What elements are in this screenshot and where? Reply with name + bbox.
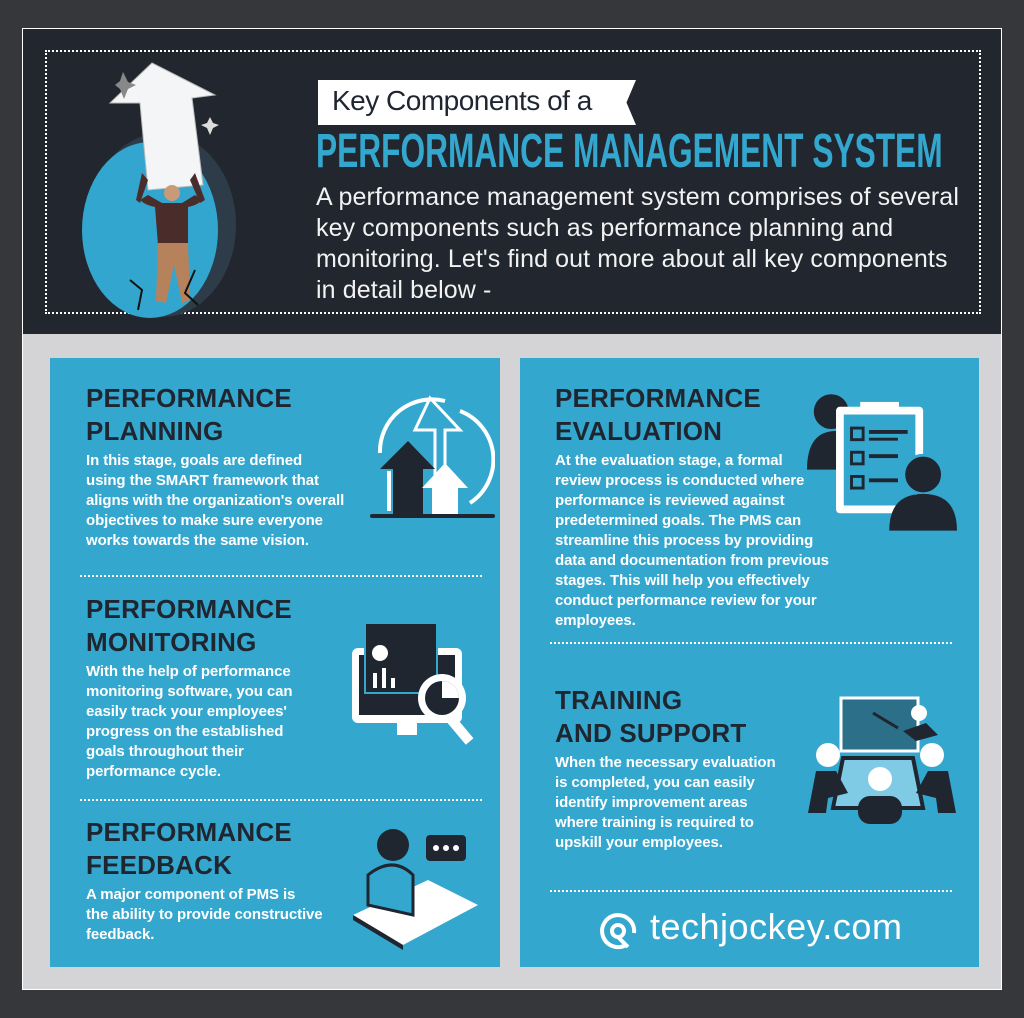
text: evaluation: stages. This will help you effectively	[555, 572, 810, 589]
text: evaluation	[555, 452, 829, 629]
heading: evaluation: EVALUATION	[555, 416, 722, 446]
intro text	[316, 183, 959, 304]
text: evaluation: employees.	[555, 612, 636, 629]
icon: feedback person	[353, 829, 478, 950]
intro text: in detail below -	[316, 276, 491, 304]
text: evaluation: data and documentation from previous	[555, 552, 829, 569]
heading: evaluation: PERFORMANCE	[555, 383, 761, 413]
heading: monitoring: MONITORING	[86, 627, 257, 657]
heading: planning	[86, 383, 292, 446]
title: PERFORMANCE MANAGEMENT SYSTEM	[316, 125, 943, 178]
heading: monitoring: PERFORMANCE	[86, 594, 292, 624]
text: monitoring: progress on the established	[86, 723, 283, 740]
icon: monitor with magnifier	[352, 624, 474, 745]
text: planning: objectives to make sure everyone	[86, 512, 323, 529]
text: training: is completed, you can easily	[555, 774, 755, 791]
text: planning: aligns with the organization's overall	[86, 492, 344, 509]
icon: training meeting	[808, 696, 956, 824]
text: monitoring: With the help of performance	[86, 663, 291, 680]
heading: monitoring	[86, 594, 292, 657]
text: monitoring: monitoring software, you can	[86, 683, 292, 700]
heading: training	[555, 685, 746, 748]
text: monitoring: performance cycle.	[86, 763, 221, 780]
text: training: upskill your employees.	[555, 834, 723, 851]
text: training: identify improvement areas	[555, 794, 747, 811]
text: training: where training is required to	[555, 814, 754, 831]
text: feedback: the ability to provide constructive	[86, 906, 323, 923]
text: evaluation: predetermined goals. The PMS can	[555, 512, 801, 529]
heading: evaluation	[555, 383, 761, 446]
subtitle label	[318, 80, 636, 125]
text: evaluation: streamline this process by providing	[555, 532, 813, 549]
text: feedback: feedback.	[86, 926, 154, 943]
illustration: man with arrow	[82, 62, 236, 318]
text: evaluation: conduct performance review for your	[555, 592, 817, 609]
text: evaluation: At the evaluation stage, a formal	[555, 452, 783, 469]
text: planning: using the SMART framework that	[86, 472, 319, 489]
heading: training: TRAINING	[555, 685, 682, 715]
icon: arrows	[370, 396, 495, 518]
heading: feedback: FEEDBACK	[86, 850, 232, 880]
heading: training: AND SUPPORT	[555, 718, 746, 748]
text: planning: In this stage, goals are defined	[86, 452, 302, 469]
text: planning	[86, 452, 344, 549]
text: monitoring: easily track your employees'	[86, 703, 287, 720]
heading: feedback	[86, 817, 292, 880]
text: training	[555, 754, 776, 851]
subtitle label: Key Components of a	[332, 85, 592, 116]
panel: left	[50, 358, 500, 967]
text: evaluation: performance is reviewed against	[555, 492, 784, 509]
intro text: A performance management system comprises of several	[316, 183, 959, 211]
text: feedback: A major component of PMS is	[86, 886, 295, 903]
text: evaluation: review process is conducted where	[555, 472, 804, 489]
heading: planning: PERFORMANCE	[86, 383, 292, 413]
text: monitoring	[86, 663, 292, 780]
text: training: When the necessary evaluation	[555, 754, 776, 771]
heading: feedback: PERFORMANCE	[86, 817, 292, 847]
header panel	[23, 29, 1001, 334]
logo: techjockey: techjockey.com	[650, 906, 902, 947]
intro text: monitoring. Let's find out more about all key components	[316, 245, 948, 273]
text: feedback	[86, 886, 323, 943]
text: planning: works towards the same vision.	[86, 532, 309, 549]
heading: planning: PLANNING	[86, 416, 223, 446]
text: monitoring: goals throughout their	[86, 743, 244, 760]
intro text: key components such as performance planning and	[316, 214, 893, 242]
icon: evaluation clipboard	[807, 394, 957, 531]
panel: right	[520, 358, 979, 967]
